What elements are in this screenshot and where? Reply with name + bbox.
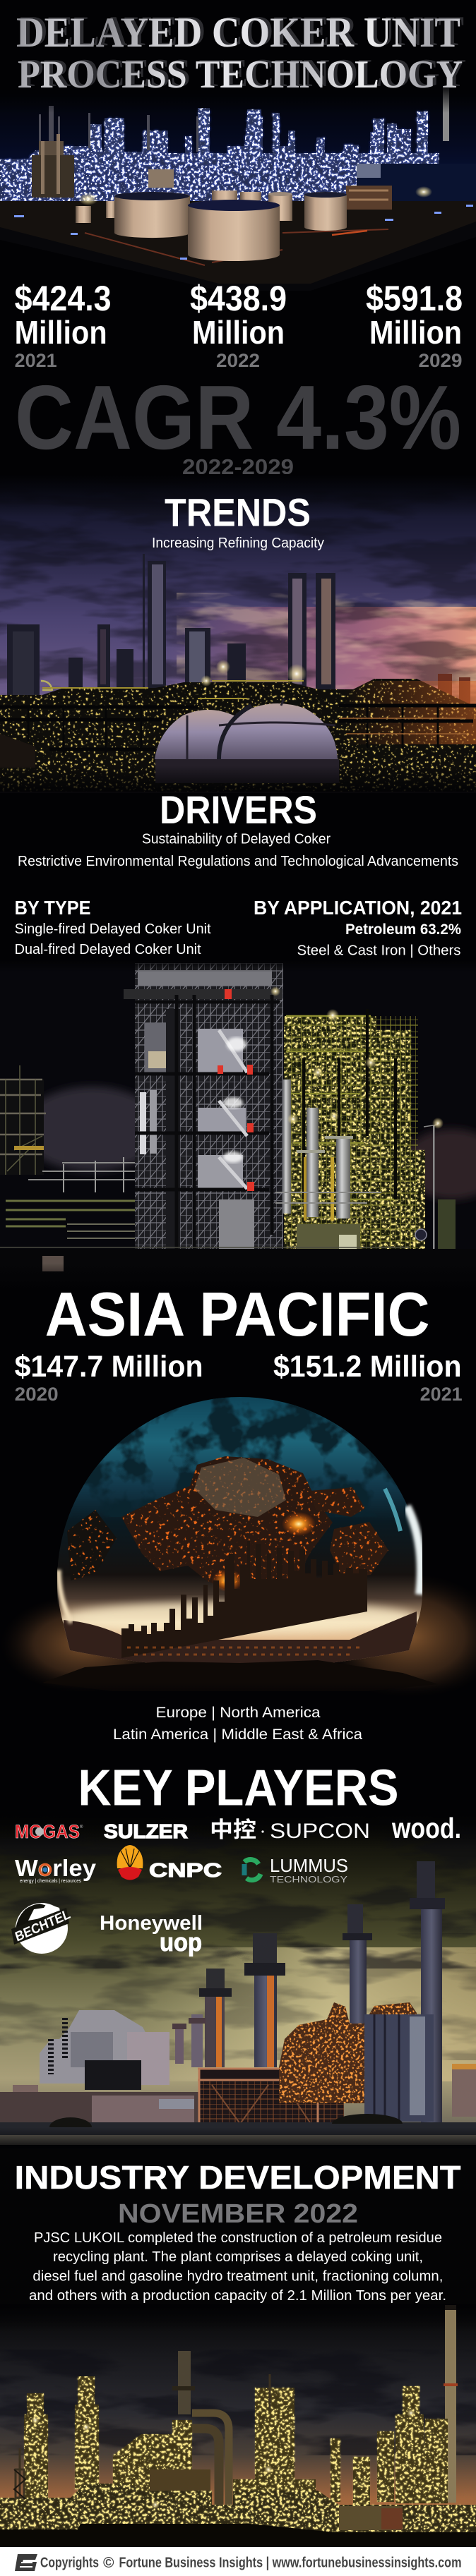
pipe rack xyxy=(198,2069,345,2124)
description: and others with a production capacity of 2.1 Million Tons per year. xyxy=(29,2288,446,2304)
by type: BY TYPE xyxy=(15,897,91,919)
description xyxy=(29,2230,446,2304)
photo: coker structure at night xyxy=(0,960,476,1291)
horizon glow xyxy=(64,1602,417,1633)
by application: Petroleum 63.2% xyxy=(345,921,461,938)
logo: CNPC xyxy=(117,1845,222,1881)
logo: Lummus: LUMMUS xyxy=(270,1855,348,1876)
footer: © xyxy=(103,2555,114,2571)
value 2021: 2021 xyxy=(15,350,57,371)
lit towers and structures xyxy=(0,2376,476,2548)
distillation towers xyxy=(7,554,470,713)
trends xyxy=(152,490,324,551)
trends: Increasing Refining Capacity xyxy=(152,536,324,551)
value 2022: $438.9 xyxy=(190,279,287,318)
by application xyxy=(254,897,462,958)
dark hall on right xyxy=(357,164,476,205)
market values xyxy=(15,279,463,371)
spherical domes xyxy=(155,699,339,783)
hot spots xyxy=(282,1512,316,1536)
other regions xyxy=(113,1705,362,1743)
description: PJSC LUKOIL completed the construction of a petroleum residue xyxy=(34,2230,442,2246)
inner ground xyxy=(64,1611,417,1663)
lattice mast xyxy=(16,2374,270,2498)
drivers xyxy=(18,787,458,869)
foreground silhouette xyxy=(0,2524,476,2547)
red panels xyxy=(218,989,254,1191)
value 2029 xyxy=(366,279,463,371)
by type: Single-fired Delayed Coker Unit xyxy=(15,921,211,937)
logo: SUPCON xyxy=(210,1818,370,1843)
photo: power plant at dusk xyxy=(0,1813,476,2152)
photo: refinery with golden lights xyxy=(0,2304,476,2548)
logo: Bechtel: BECHTEL xyxy=(13,1906,73,1945)
silver tower xyxy=(124,963,283,1249)
logo: SUPCON: 中控 xyxy=(210,1818,256,1842)
plant structures with lights xyxy=(0,679,476,792)
title xyxy=(16,8,466,97)
glowing rim xyxy=(59,1570,71,1623)
key players heading: KEY PLAYERS xyxy=(78,1760,398,1816)
value 2020 xyxy=(15,1350,203,1405)
value 2021 xyxy=(273,1350,463,1405)
ground band xyxy=(42,1660,438,1691)
logo: Worley: Worley xyxy=(15,1855,97,1881)
blue steel casing xyxy=(364,2014,476,2122)
logo: Lummus: TECHNOLOGY xyxy=(270,1874,347,1885)
glow lights xyxy=(31,2409,415,2538)
upper continents xyxy=(84,1397,398,1504)
logo: SUPCON: SUPCON xyxy=(270,1820,370,1843)
street lamp xyxy=(415,1118,444,1281)
logo: MOGAS: MOGAS xyxy=(15,1821,80,1842)
description: recycling plant. The plant comprises a delayed coking unit, xyxy=(53,2249,423,2265)
logo: wood: wood. xyxy=(391,1812,461,1844)
left small structure xyxy=(0,1065,46,1175)
trends: TRENDS xyxy=(165,490,311,535)
value 2021: Million xyxy=(15,314,107,351)
logo: Lummus xyxy=(244,1855,348,1885)
title shadow xyxy=(20,8,466,95)
warm glow points xyxy=(78,193,98,205)
photo: sunset refinery with domes xyxy=(0,474,476,801)
value 2020: $147.7 Million xyxy=(15,1350,203,1384)
icon: CNPC shell xyxy=(117,1845,143,1880)
value 2020: 2020 xyxy=(15,1384,59,1405)
value 2029: $591.8 xyxy=(366,279,463,318)
drivers: DRIVERS xyxy=(160,787,317,832)
foreground wall xyxy=(0,1249,476,1291)
storage tanks xyxy=(76,169,392,261)
other regions: Europe | North America xyxy=(155,1705,321,1721)
industry development xyxy=(0,2148,476,2311)
central stack and arch pipes xyxy=(172,2351,229,2508)
icon: Lummus arcs xyxy=(244,1860,261,1880)
by application: Steel & Cast Iron | Others xyxy=(297,943,460,958)
icon: Fortune Business Insights logo xyxy=(15,2554,37,2571)
yellow-lit structure xyxy=(284,1016,425,1249)
logo: Honeywell UOP: uop xyxy=(160,1928,202,1957)
value 2029: Million xyxy=(369,314,462,351)
value 2029: 2029 xyxy=(418,350,462,371)
ground xyxy=(0,201,476,286)
other regions: Latin America | Middle East & Africa xyxy=(113,1727,362,1743)
pipe racks xyxy=(6,1157,187,1238)
value 2021: 2021 xyxy=(420,1384,463,1405)
industry development: INDUSTRY DEVELOPMENT xyxy=(15,2159,461,2196)
refinery towers and lights xyxy=(0,108,439,213)
city skyline xyxy=(121,1541,367,1658)
exhaust stacks xyxy=(172,1861,445,2124)
lit continents xyxy=(67,1456,388,1594)
logo: Worley: energy | chemicals | resources xyxy=(20,1879,81,1884)
building xyxy=(150,2469,403,2530)
title text xyxy=(16,9,463,97)
left furnace column xyxy=(39,141,64,191)
asia pacific heading: ASIA PACIFIC xyxy=(45,1279,430,1349)
value 2022: 2022 xyxy=(216,350,260,371)
by type xyxy=(15,897,211,957)
drivers: Sustainability of Delayed Coker xyxy=(142,831,331,847)
white chimney xyxy=(443,88,449,141)
foreground xyxy=(0,2122,476,2135)
CAGR: 2022-2029 xyxy=(182,454,294,479)
logo: Honeywell UOP xyxy=(100,1912,203,1957)
value 2022: Million xyxy=(192,314,285,351)
logos xyxy=(11,1812,461,1957)
orange lit plant xyxy=(279,2002,417,2103)
drivers: Restrictive Environmental Regulations and Technological Advancements xyxy=(18,854,458,869)
plant pipework xyxy=(0,681,476,755)
tall chimney xyxy=(444,2305,458,2503)
footer: Copyrights xyxy=(40,2556,99,2571)
logo: Honeywell UOP: Honeywell xyxy=(100,1912,203,1935)
asia pacific heading xyxy=(15,1279,463,1405)
lamp lights xyxy=(270,986,376,1125)
footer xyxy=(0,2547,476,2576)
description: diesel fuel and gasoline hydro treatment unit, fractioning column, xyxy=(32,2269,443,2285)
industry development: NOVEMBER 2022 xyxy=(118,2199,358,2229)
globe with burning city xyxy=(0,1397,476,1700)
plant base wall xyxy=(0,2092,201,2124)
by application: BY APPLICATION, 2021 xyxy=(254,897,462,919)
value 2021: $151.2 Million xyxy=(273,1350,462,1384)
value 2022 xyxy=(190,279,287,371)
value 2021: $424.3 xyxy=(15,279,112,318)
logo: CNPC: CNPC xyxy=(149,1859,222,1881)
heat recovery building xyxy=(13,2010,169,2103)
logo: SULZER: SULZER xyxy=(104,1820,188,1842)
by type: Dual-fired Delayed Coker Unit xyxy=(15,942,201,957)
logo: MOGAS: ® xyxy=(80,1825,83,1830)
tall stacks xyxy=(39,106,198,159)
value 2021 xyxy=(15,279,112,371)
photo: blue-lit refinery with storage tanks xyxy=(0,85,476,291)
